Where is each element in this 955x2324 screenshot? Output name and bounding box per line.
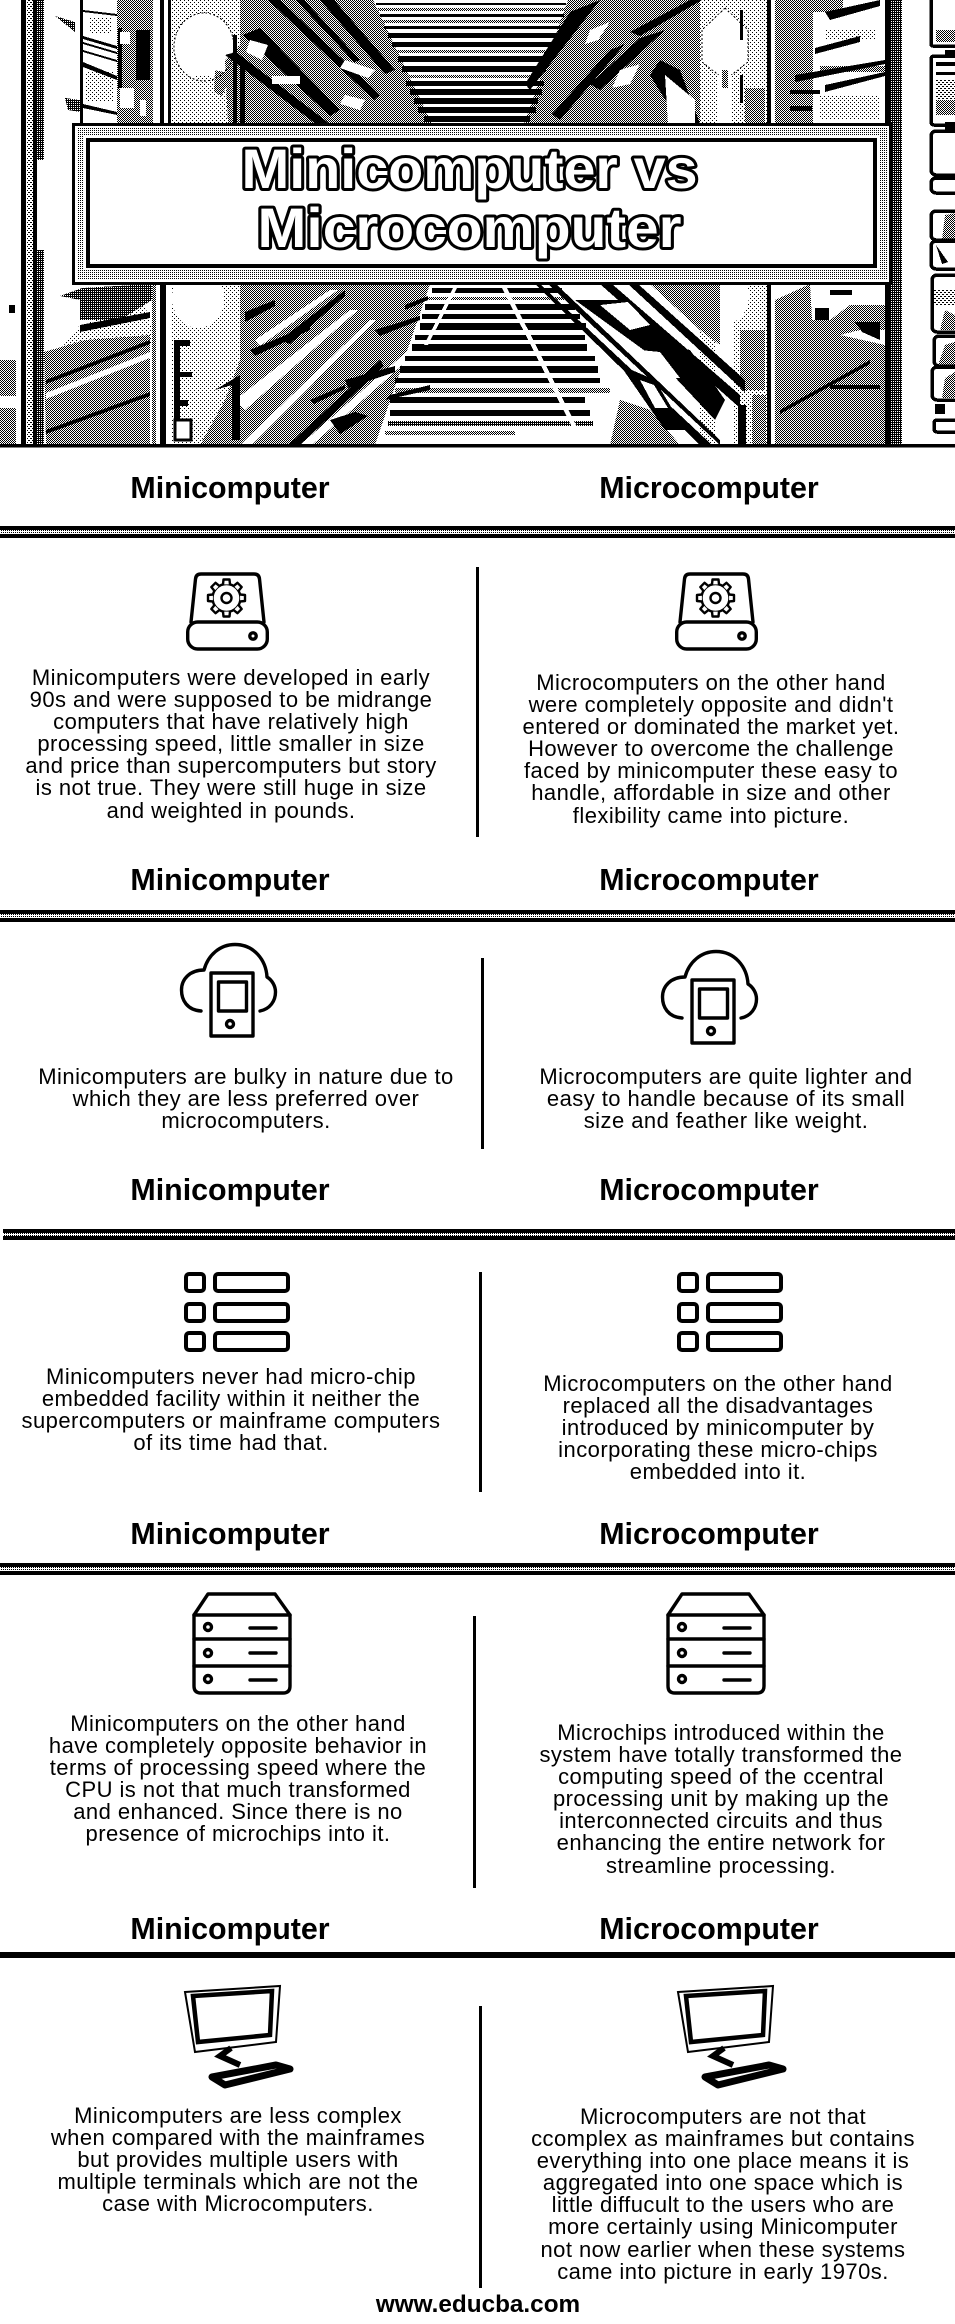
- text: microcomputer speed: processing unit by making up the: [553, 1786, 889, 1811]
- floor left diagonals: [200, 284, 430, 445]
- text: minicomputer complexity: Minicomputers are less complex: [74, 2103, 402, 2128]
- left edge bars: [0, 0, 44, 445]
- text: microcomputer origins: were completely opposite and didn't: [529, 692, 893, 717]
- text: microcomputer speed: enhancing the entire network for: [557, 1830, 885, 1855]
- heading: Microcomputer row 1: Microcomputer: [599, 471, 819, 505]
- text: microcomputer origins: entered or dominated the market yet.: [523, 714, 899, 739]
- far-right panel chunks: [931, 0, 955, 432]
- text: microcomputer complexity: more certainly using Minicomputer: [548, 2214, 898, 2239]
- right column and oval: [700, 0, 771, 446]
- text: microcomputer speed: system have totally transformed the: [539, 1742, 902, 1767]
- text: minicomputer origins: Minicomputers were developed in early: [32, 665, 430, 690]
- text: minicomputer origins: processing speed, little smaller in size: [37, 731, 425, 756]
- text: minicomputer bulk: [38, 1064, 454, 1133]
- text: microcomputer speed: Microchips introduced within the: [557, 1720, 885, 1745]
- text: microcomputer speed: computing speed of the ccentral: [558, 1764, 884, 1789]
- text: microcomputer origins: flexibility came into picture.: [573, 803, 849, 828]
- text: minicomputer bulk: Minicomputers are bulky in nature due to: [38, 1064, 454, 1089]
- text: minicomputer origins: and price than supercomputers but story: [25, 753, 437, 778]
- text: minicomputer speed: [49, 1711, 427, 1846]
- left rack top: [55, 0, 171, 446]
- text: minicomputer origins: 90s and were supposed to be midrange: [30, 687, 432, 712]
- title text: [242, 137, 698, 262]
- title text: Minicomputer vs: [242, 137, 698, 200]
- text: minicomputer speed: and enhanced. Since there is no: [73, 1799, 403, 1824]
- icon: cloud with device, right: [660, 950, 758, 1045]
- text: microcomputer complexity: little diffucult to the users who are: [552, 2192, 894, 2217]
- icon: server stack, left: [192, 1592, 292, 1695]
- text: minicomputer complexity: case with Microcomputers.: [102, 2191, 374, 2216]
- title text: Microcomputer: [258, 196, 682, 259]
- right rack top: [775, 0, 902, 445]
- heading: Microcomputer row 4: Microcomputer: [599, 1517, 819, 1551]
- text: minicomputer speed: Minicomputers on the other hand: [70, 1711, 406, 1736]
- text: microcomputer complexity: aggregated into one space which is: [543, 2170, 903, 2195]
- icon: server stack, right: [666, 1592, 766, 1695]
- text: microcomputer origins: Microcomputers on the other hand: [536, 670, 886, 695]
- icon: monitor and keyboard, right: [676, 1984, 786, 2088]
- text: microcomputer complexity: [531, 2104, 915, 2284]
- text: minicomputer bulk: microcomputers.: [161, 1108, 331, 1133]
- text: minicomputer speed: have completely opposite behavior in: [49, 1733, 427, 1758]
- left column and oval: [172, 0, 245, 445]
- text: microcomputer origins: handle, affordable in size and other: [531, 780, 891, 805]
- text: minicomputer complexity: multiple terminals which are not the: [57, 2169, 419, 2194]
- text: minicomputer micro-chip: Minicomputers never had micro-chip: [46, 1364, 416, 1389]
- text: microcomputer origins: However to overcome the challenge: [528, 736, 894, 761]
- text: minicomputer origins: [25, 665, 437, 823]
- text: microcomputer weight: easy to handle because of its small: [547, 1086, 905, 1111]
- ceiling right diagonals: [524, 0, 702, 124]
- text: minicomputer bulk: which they are less preferred over: [73, 1086, 419, 1111]
- text: microcomputer speed: streamline processing.: [606, 1853, 836, 1878]
- text: minicomputer complexity: [50, 2103, 425, 2216]
- icon: drive with gear, right: [675, 572, 758, 651]
- text: microcomputer complexity: everything into one place means it is: [537, 2148, 909, 2173]
- text: microcomputer complexity: ccomplex as mainframes but contains: [531, 2126, 915, 2151]
- title panel: [72, 123, 892, 285]
- text: microcomputer weight: size and feather like weight.: [584, 1108, 868, 1133]
- text: microcomputer micro-chip: Microcomputers on the other hand: [543, 1371, 893, 1396]
- heading: Microcomputer row 2: Microcomputer: [599, 863, 819, 897]
- text: minicomputer micro-chip: embedded facility within it neither the: [42, 1386, 420, 1411]
- heading: Minicomputer row 4: Minicomputer: [130, 1517, 330, 1551]
- text: minicomputer origins: is not true. They were still huge in size: [36, 775, 426, 800]
- text: microcomputer complexity: Microcomputers are not that: [580, 2104, 866, 2129]
- text: minicomputer speed: CPU is not that much transformed: [65, 1777, 411, 1802]
- text: microcomputer micro-chip: [543, 1371, 893, 1484]
- heading: Minicomputer row 5: Minicomputer: [130, 1912, 330, 1946]
- text: microcomputer complexity: came into picture in early 1970s.: [557, 2259, 889, 2284]
- text: minicomputer complexity: but provides multiple users with: [77, 2147, 399, 2172]
- text: minicomputer complexity: when compared with the mainframes: [51, 2125, 425, 2150]
- text: minicomputer micro-chip: [22, 1364, 440, 1455]
- icon: list rows, right: [677, 1272, 783, 1352]
- banner image: server corridor: [0, 0, 955, 448]
- text: microcomputer micro-chip: embedded into it.: [630, 1459, 806, 1484]
- icon: cloud with device, left: [180, 942, 278, 1038]
- right bottom dark rack: [774, 284, 890, 445]
- icon: list rows, left: [184, 1272, 290, 1352]
- text: minicomputer speed: terms of processing speed where the: [50, 1755, 426, 1780]
- text: microcomputer speed: [539, 1720, 902, 1878]
- text: minicomputer origins: and weighted in pounds.: [107, 798, 355, 823]
- heading: Microcomputer row 3: Microcomputer: [599, 1173, 819, 1207]
- heading: Minicomputer row 1: Minicomputer: [130, 471, 330, 505]
- text: minicomputer speed: presence of microchips into it.: [86, 1821, 390, 1846]
- text: microcomputer weight: Microcomputers are quite lighter and: [539, 1064, 913, 1089]
- floor right diagonals: [535, 284, 745, 445]
- icon: drive with gear, left: [186, 572, 269, 651]
- footer url: www.educba.com: [376, 2291, 580, 2318]
- text: minicomputer micro-chip: of its time had that.: [133, 1430, 329, 1455]
- heading: Minicomputer row 2: Minicomputer: [130, 863, 330, 897]
- text: microcomputer origins: [523, 670, 899, 828]
- ceiling left diagonals: [225, 0, 432, 124]
- left bottom dark rack: [44, 284, 156, 445]
- floor centre stripes: [385, 284, 610, 445]
- text: microcomputer micro-chip: introduced by minicomputer by: [562, 1415, 874, 1440]
- text: microcomputer speed: interconnected circuits and thus: [559, 1808, 883, 1833]
- banner base line: [0, 444, 955, 448]
- heading: Microcomputer row 5: Microcomputer: [599, 1912, 819, 1946]
- text: microcomputer weight: [539, 1064, 913, 1133]
- heading: Minicomputer row 3: Minicomputer: [130, 1173, 330, 1207]
- text: microcomputer micro-chip: replaced all the disadvantages: [563, 1393, 873, 1418]
- text: microcomputer complexity: not now earlier when these systems: [540, 2237, 906, 2262]
- title frame: [86, 138, 877, 268]
- ceiling centre stripes: [376, 3, 566, 122]
- text: microcomputer micro-chip: incorporating these micro-chips: [558, 1437, 878, 1462]
- text: minicomputer origins: computers that have relatively high: [53, 709, 409, 734]
- text: microcomputer origins: faced by minicomputer these easy to: [524, 758, 898, 783]
- text: minicomputer micro-chip: supercomputers or mainframe computers: [22, 1408, 440, 1433]
- icon: monitor and keyboard, left: [184, 1984, 294, 2088]
